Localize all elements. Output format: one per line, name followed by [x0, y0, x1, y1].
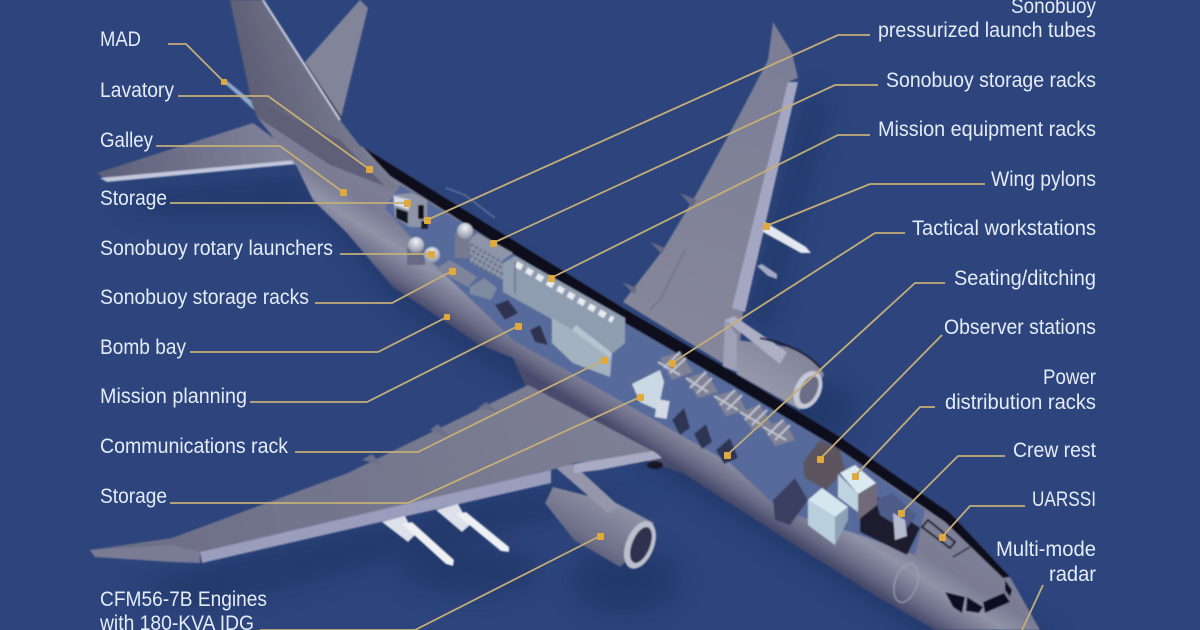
windscreen — [945, 580, 1012, 613]
cabin floor cutaway — [385, 185, 925, 555]
right labels: Mission equipment racks — [878, 118, 1096, 141]
left labels: Storage — [100, 485, 167, 508]
left labels: Storage — [100, 187, 167, 210]
far engine — [725, 316, 828, 414]
mission planning seat — [495, 300, 548, 345]
left labels: CFM56-7B Engines — [100, 588, 267, 611]
right labels: Wing pylons — [991, 168, 1096, 191]
drop shadows — [110, 90, 1060, 630]
black top strip — [363, 147, 1010, 578]
missiles — [382, 504, 509, 566]
forward seats — [773, 478, 808, 525]
left labels: Lavatory — [100, 79, 174, 102]
left labels: Communications rack — [100, 435, 288, 458]
near wing — [90, 385, 663, 563]
left labels: Sonobuoy storage racks — [100, 286, 309, 309]
right labels: Observer stations — [944, 316, 1096, 339]
far wing missiles — [757, 222, 811, 279]
right labels: Tactical workstations — [912, 217, 1096, 240]
seats — [655, 399, 738, 464]
right labels: Multi-mode — [996, 538, 1096, 561]
left labels: Bomb bay — [100, 336, 186, 359]
left labels: Mission planning — [100, 385, 247, 408]
observer station — [803, 440, 845, 490]
mission equipment racks — [503, 256, 625, 377]
storage rack grid — [470, 233, 513, 280]
right labels: UARSSI — [1032, 488, 1096, 511]
left labels — [99, 28, 333, 630]
tailplane — [97, 123, 297, 182]
far wing — [622, 22, 798, 372]
tactical workstations — [658, 352, 795, 446]
left labels: MAD — [100, 28, 141, 51]
left labels: Galley — [100, 129, 153, 152]
right labels: Crew rest — [1013, 439, 1096, 462]
leader lines — [156, 35, 1043, 630]
antenna marks — [953, 547, 970, 557]
right labels — [878, 0, 1096, 586]
left labels: Sonobuoy rotary launchers — [100, 237, 333, 260]
right labels: pressurized launch tubes — [878, 19, 1096, 42]
aircraft — [90, 0, 1040, 630]
right labels: Seating/ditching — [954, 267, 1096, 290]
power distribution racks — [808, 465, 877, 545]
right labels: radar — [1049, 563, 1096, 586]
sensor rail — [446, 188, 495, 218]
communications rack — [632, 370, 664, 410]
right labels: Sonobuoy storage racks — [886, 69, 1096, 92]
fin — [230, 0, 400, 190]
MAD boom — [221, 80, 258, 110]
door — [889, 561, 923, 605]
callout dots — [221, 79, 946, 541]
lower storage racks — [437, 260, 497, 300]
near engine — [545, 464, 662, 573]
crew rest cutout — [860, 493, 920, 555]
sonobuoy domes — [407, 223, 473, 265]
fuselage — [252, 104, 1040, 630]
right labels: Power — [1043, 366, 1096, 389]
right labels: distribution racks — [945, 391, 1096, 414]
far fin stub — [305, 0, 368, 118]
aft door unit — [393, 193, 428, 229]
UARSSI hatch — [922, 520, 955, 548]
